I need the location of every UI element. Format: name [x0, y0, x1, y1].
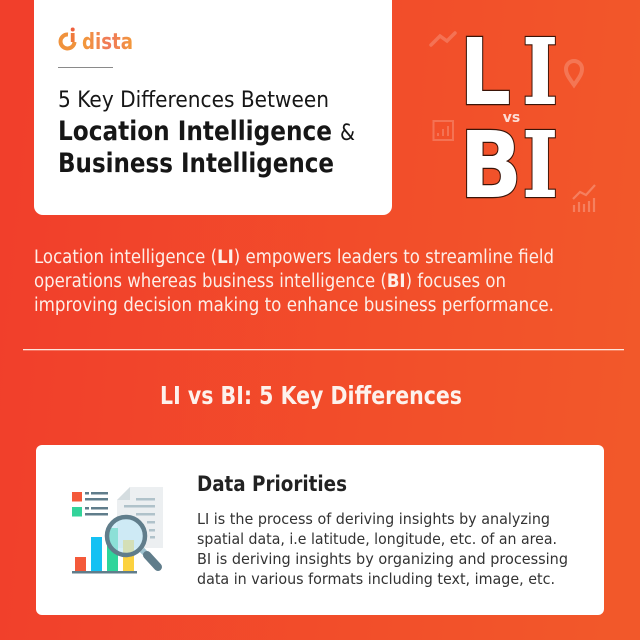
- big lettering: BI: [460, 111, 557, 219]
- icon: location pin: [566, 61, 582, 85]
- panel: data priorities: [36, 445, 604, 615]
- title text: [58, 87, 355, 179]
- intro paragraph: improving decision making to enhance business performance.: [34, 295, 554, 316]
- title text: Business Intelligence: [58, 148, 334, 179]
- icon: chart box: [434, 121, 453, 140]
- body text: spatial data, i.e latitude, longitude, etc. of an area.: [197, 530, 557, 548]
- intro paragraph: Location intelligence (LI) empowers leaders to streamline field: [34, 247, 554, 268]
- big lettering: LI: [460, 20, 557, 126]
- intro paragraph: operations whereas business intelligence (BI) focuses on: [34, 271, 506, 292]
- big lettering: BI: I: [523, 113, 557, 218]
- panel: title card: [34, 0, 392, 215]
- icon: line trend: [431, 33, 455, 45]
- body text: BI is deriving insights by organizing and processing: [197, 550, 568, 568]
- big lettering: LI: L: [460, 20, 511, 126]
- icon: bar growth chart: [573, 185, 595, 212]
- body text: data in various formats including text, image, etc.: [197, 570, 555, 588]
- heading: data priorities: Data Priorities: [197, 472, 347, 496]
- section heading: LI vs BI: 5 Key Differences: [160, 381, 462, 410]
- icon: data analysis: [72, 487, 163, 574]
- big lettering: BI: I: [523, 113, 557, 218]
- logo: dista: [61, 28, 133, 55]
- body text: LI is the process of deriving insights by analyzing: [197, 510, 550, 528]
- big lettering: BI: B: [460, 111, 522, 219]
- intro paragraph: [34, 247, 554, 316]
- big lettering: LI: I: [523, 20, 557, 125]
- body text: [197, 510, 568, 588]
- title text: &: [340, 121, 355, 146]
- logo: dista: dista: [82, 30, 133, 55]
- title text: 5 Key Differences Between: [58, 87, 329, 113]
- big lettering: LI: I: [523, 20, 557, 125]
- title text: Location Intelligence: [58, 116, 332, 147]
- label: vs: vs: [503, 110, 520, 126]
